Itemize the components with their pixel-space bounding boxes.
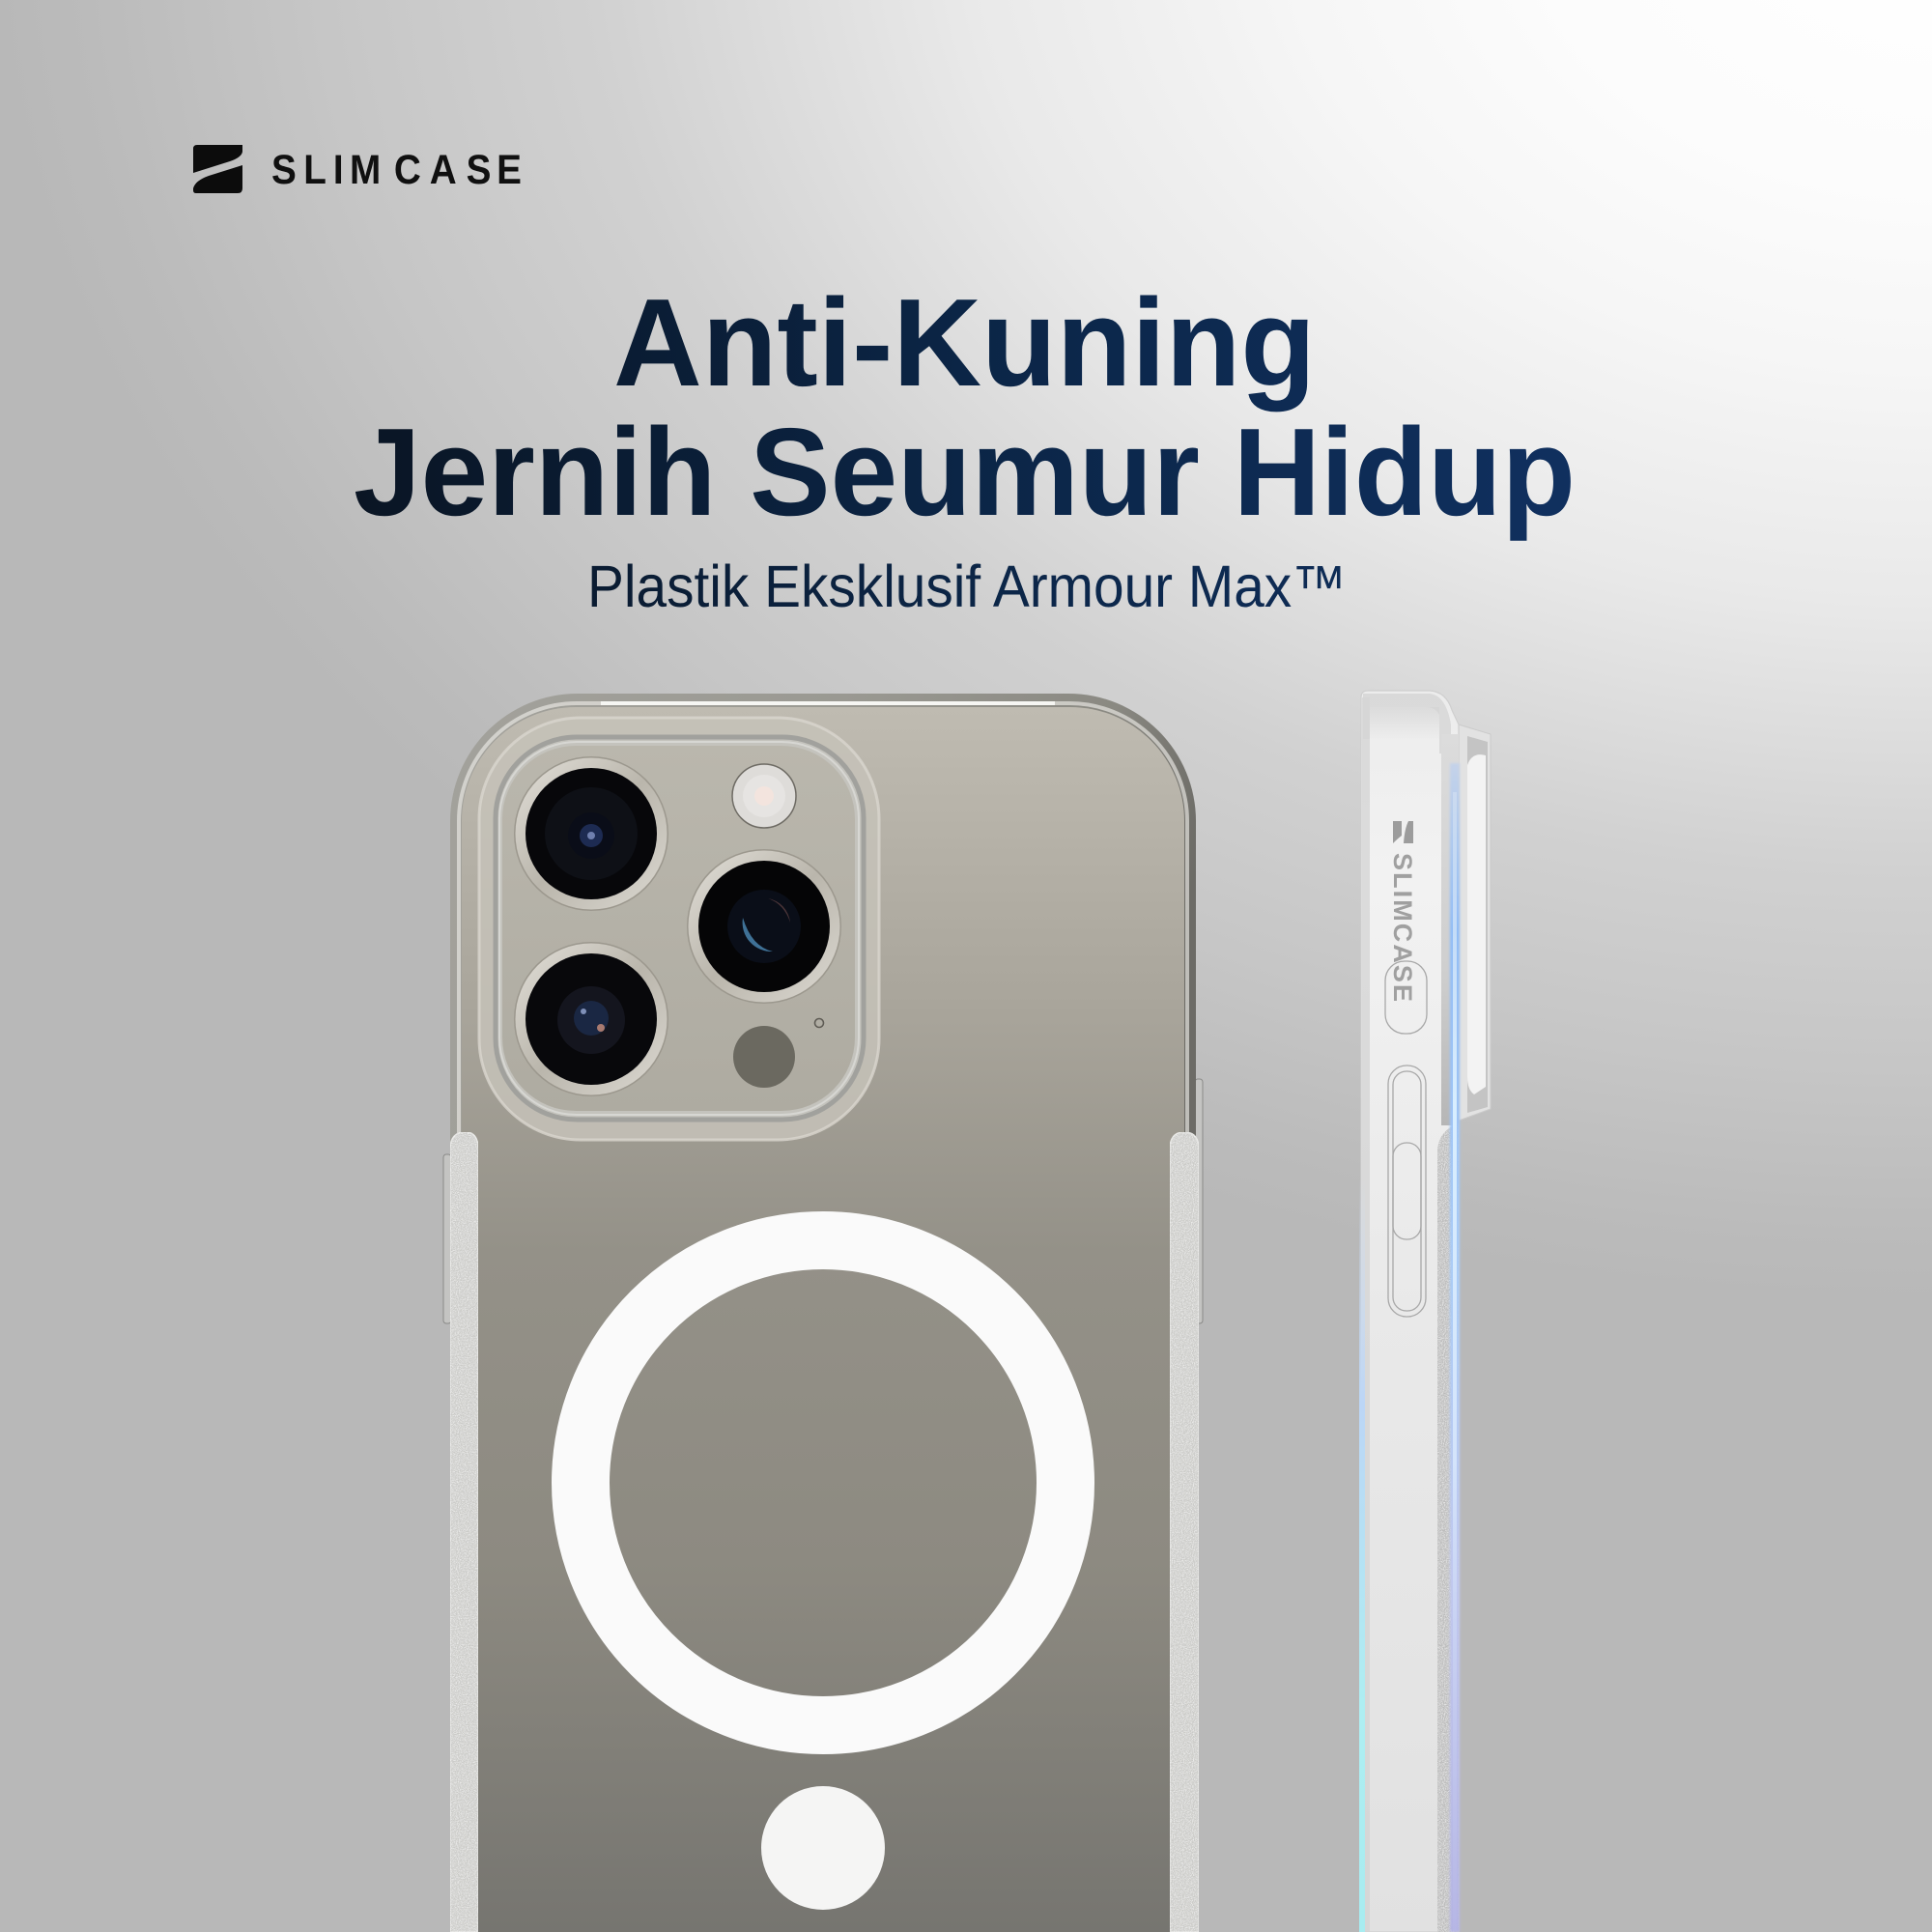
phone side view [1359, 691, 1491, 1932]
magsafe alignment dot [761, 1786, 885, 1910]
camera glass side [1467, 754, 1486, 1094]
magsafe ring [581, 1240, 1065, 1725]
inner edge shadow [1441, 734, 1459, 1125]
inner top shadow [1370, 707, 1439, 746]
right rail [1170, 1132, 1199, 1932]
subtitle: Plastik Eksklusif Armour Max™ [587, 554, 1347, 619]
power button outline [1385, 961, 1427, 1034]
camera bump [479, 718, 879, 1140]
iridescent strip left [1359, 1179, 1365, 1932]
brand logo [193, 145, 522, 193]
left rail [450, 1132, 478, 1932]
lens: main [514, 756, 668, 911]
title: Jernih Seumur Hidup [354, 403, 1576, 542]
top centre highlight [601, 701, 1055, 705]
title: Anti-Kuning [613, 273, 1316, 412]
lidar sensor [733, 1026, 795, 1088]
lower grey rail [1437, 1123, 1459, 1932]
volume button outline [1388, 1065, 1426, 1317]
camera glass shading [1467, 736, 1488, 1113]
lens: ultra wide [514, 942, 668, 1096]
brand name: SLIMCASE [271, 146, 522, 192]
case frame [450, 694, 1196, 1932]
iridescent core [1453, 792, 1457, 1932]
camera bump side [1449, 720, 1491, 1121]
flash [732, 764, 796, 828]
title [354, 273, 1576, 542]
top lip shading [1363, 694, 1451, 753]
frame highlight [459, 703, 1187, 1135]
side brand name: SLIMCASE [1388, 853, 1417, 1002]
plateau clear highlight [499, 742, 859, 1115]
side logo icon [1393, 821, 1413, 843]
left edge shading [1362, 697, 1370, 1932]
microphone [815, 1018, 823, 1028]
case camera surround [479, 718, 879, 1140]
phone back view [443, 694, 1203, 1932]
camera plateau [502, 746, 855, 1111]
icon: slimcase mark [193, 145, 242, 193]
side buttons [443, 1079, 1203, 1323]
phone back body [462, 707, 1184, 1932]
lens: telephoto [687, 849, 841, 1004]
clear glass ring [496, 737, 864, 1120]
iridescent strip right [1450, 763, 1460, 1932]
case side body [1361, 691, 1459, 1932]
